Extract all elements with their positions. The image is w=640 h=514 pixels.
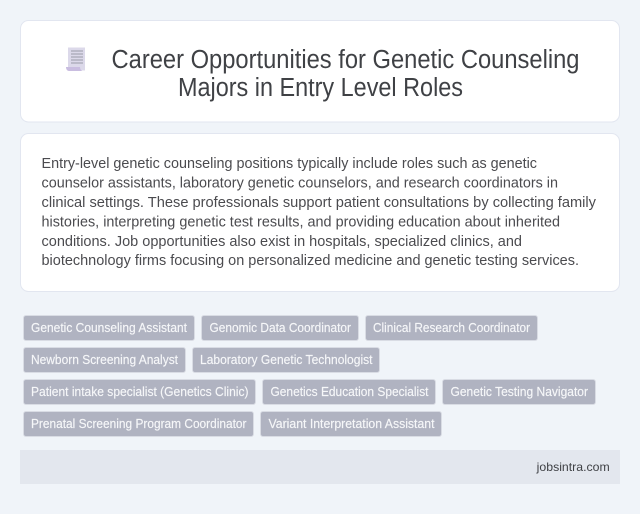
- tag: Genetics Education Specialist: Genetics Education Specialist: [270, 385, 429, 399]
- panel: header: [20, 20, 620, 122]
- icon: document scroll: [66, 48, 85, 71]
- panel: description: [20, 134, 620, 292]
- tag: Variant Interpretation Assistant: Variant Interpretation Assistant: [268, 417, 435, 431]
- tag: Genomic Data Coordinator: Genomic Data Coordinator: [210, 321, 351, 335]
- tag: Prenatal Screening Program Coordinator: Prenatal Screening Program Coordinator: [31, 417, 246, 431]
- tag: Patient intake specialist (Genetics Clinic): Patient intake specialist (Genetics Clinic): [31, 385, 248, 399]
- tag: Genetics Education Specialist: [262, 380, 436, 404]
- text block: description: [42, 156, 597, 269]
- tag: Laboratory Genetic Technologist: [192, 348, 380, 372]
- text block: description: counselor assistants, laboratory genetic counselors, and research coordinators in: [42, 176, 558, 192]
- tag: Newborn Screening Analyst: Newborn Screening Analyst: [31, 353, 179, 367]
- tag: Genetic Testing Navigator: Genetic Testing Navigator: [450, 385, 588, 399]
- tag: Genetic Counseling Assistant: Genetic Counseling Assistant: [31, 321, 188, 335]
- text block: description: conditions. Job opportunities also exist in hospitals, specialized clinics, and: [42, 234, 522, 250]
- tag: Prenatal Screening Program Coordinator: [24, 412, 254, 436]
- text block: description: biotechnology firms focusing on personalized medicine and genetic testing services.: [42, 253, 579, 269]
- text block: description: histories, interpreting genetic test results, and providing education about inherited: [42, 214, 560, 230]
- tag: Newborn Screening Analyst: [24, 348, 186, 372]
- title: Career Opportunities for Genetic Counseling: [112, 46, 580, 74]
- text block: description: Entry-level genetic counseling positions typically include roles such as genetic: [42, 156, 537, 172]
- tag: Patient intake specialist (Genetics Clinic): [24, 380, 256, 404]
- tag: Clinical Research Coordinator: Clinical Research Coordinator: [373, 321, 530, 335]
- footer: jobsintra.com: [536, 460, 610, 474]
- tag: Genetic Testing Navigator: [442, 380, 596, 404]
- text block: description: clinical settings. These professionals support patient consultations by collecting family: [42, 195, 597, 211]
- title: Majors in Entry Level Roles: [178, 74, 463, 102]
- tag: Genomic Data Coordinator: [202, 316, 358, 340]
- tag: Laboratory Genetic Technologist: Laboratory Genetic Technologist: [200, 353, 373, 367]
- tag: Genetic Counseling Assistant: [24, 316, 194, 340]
- title: [112, 46, 580, 102]
- tag list: [24, 316, 596, 436]
- tag: Clinical Research Coordinator: [366, 316, 538, 340]
- footer: [20, 450, 620, 484]
- tag: Variant Interpretation Assistant: [260, 412, 442, 436]
